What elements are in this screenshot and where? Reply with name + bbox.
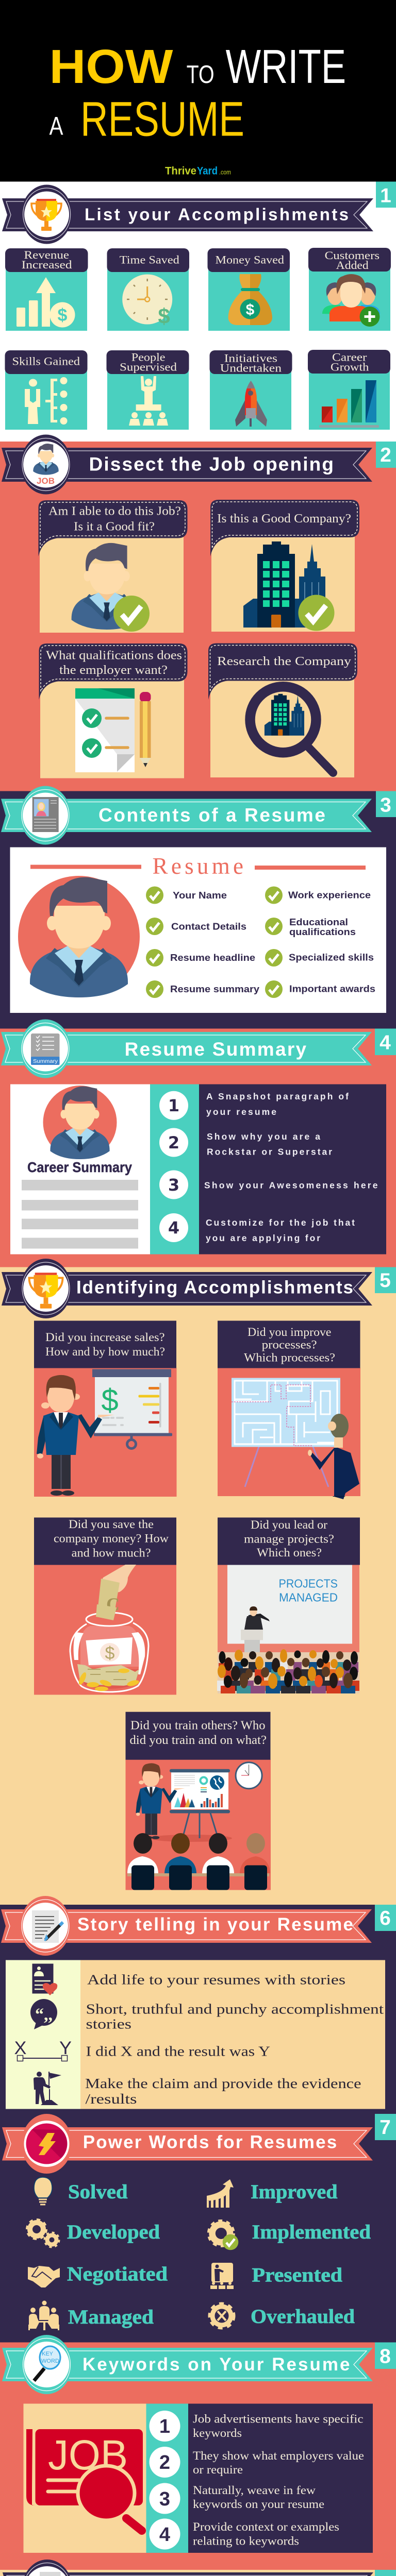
banner: Story telling: Story telling in your Resume	[77, 1914, 353, 1935]
heading: Resume: Resume	[153, 853, 243, 879]
card: saved money: company money? How	[54, 1532, 169, 1546]
icon: lightning	[26, 2124, 67, 2164]
panel: job keywords: Naturally, weave in few	[193, 2484, 316, 2497]
section 5: Identifying Accomplishments	[0, 1259, 396, 1905]
illustration: presenter and sales board: $	[101, 1383, 119, 1417]
illustration: speaker and audience: PROJECTS	[278, 1577, 338, 1590]
logo: ThriveYard.com	[165, 165, 231, 177]
icon: man with JOB label	[33, 444, 59, 486]
icon: revenue chart: $	[58, 306, 68, 325]
icon: X to Y: Y	[59, 2038, 72, 2058]
icon: trophy	[31, 199, 61, 231]
card: increase sales: Did you increase sales?	[45, 1331, 165, 1344]
panel: summary points	[150, 1084, 386, 1254]
panel: summary points: you are applying for	[206, 1233, 320, 1243]
panel: story telling tips: stories	[86, 2015, 131, 2032]
checklist of resume contents: Educational	[289, 917, 348, 927]
avatar in circle	[18, 876, 140, 997]
illustration: speaker and audience	[217, 1565, 359, 1693]
card: Is this a Good Company: Is this a Good Company?	[217, 512, 351, 526]
panel: job keywords: Provide context or examples	[193, 2520, 339, 2534]
card: improve processes: Did you improve	[248, 1326, 331, 1339]
panel: job keywords: 3	[159, 2488, 170, 2510]
icon: man with flag	[34, 2072, 61, 2105]
icon: resume document	[32, 797, 59, 832]
illustration: money jar: C	[106, 1594, 120, 1615]
checklist of resume contents: Resume headline	[170, 952, 255, 963]
illustration: money jar	[70, 1565, 148, 1692]
number tag 5: 5	[380, 1269, 391, 1292]
illustration: speaker and audience: MANAGED	[279, 1590, 338, 1604]
section 2: Dissect the Job opening	[0, 435, 396, 791]
banner: Resume Summary	[1, 1019, 372, 1078]
panel: summary points: Show why you are a	[207, 1131, 320, 1142]
number tag 6	[375, 1905, 396, 1931]
section 4: Resume Summary	[0, 1019, 396, 1267]
checklist of resume contents: Specialized skills	[289, 952, 374, 962]
title: A	[50, 111, 63, 140]
panel: job keywords	[24, 2404, 373, 2553]
icon: job search book	[26, 2429, 143, 2531]
checklist of resume contents: Work experience	[288, 889, 371, 901]
panel: story telling tips: Add life to your resumes with stories	[87, 1971, 345, 1988]
icon: trophy	[29, 1273, 62, 1309]
icon: customers	[322, 274, 380, 327]
card: improve processes: Which processes?	[244, 1351, 335, 1364]
icon: light bulb	[34, 2177, 52, 2205]
number tag 3	[376, 791, 396, 817]
icon: magnifier over company	[250, 687, 333, 773]
icon: wrench in gear	[209, 2303, 234, 2328]
panel: summary points: A Snapshot paragraph of	[206, 1091, 349, 1101]
logo: ThriveYard.com: Thrive	[165, 165, 196, 177]
banner: Dissect the Job opening: Dissect the Job opening	[89, 453, 334, 475]
section 7: Power Words for Resumes	[2, 2114, 396, 2330]
panel: job keywords: keywords	[193, 2427, 242, 2440]
number tag 7	[375, 2114, 396, 2140]
card: saved money	[34, 1518, 176, 1695]
banner: Contents of a Resume: Contents of a Resume	[98, 805, 325, 825]
card: increase sales: How and by how much?	[45, 1345, 165, 1359]
icon: rocket	[235, 381, 267, 427]
icon: keyword magnifier: KEY	[42, 2351, 54, 2357]
number tag 3: 3	[380, 794, 391, 816]
word: Solved: Solved	[68, 2181, 128, 2203]
number tag 5	[375, 1267, 396, 1293]
icon: growth arrow	[207, 2179, 234, 2208]
icon: keyword magnifier: WORD	[41, 2358, 59, 2364]
banner: Story telling	[1, 1896, 372, 1956]
icon: job search book: JOB	[48, 2432, 128, 2479]
icon: gear with tick	[208, 2221, 238, 2250]
panel: job keywords: 2	[159, 2452, 170, 2473]
icon: checklist and pencil	[75, 688, 151, 772]
number tag 9	[375, 2570, 396, 2576]
card: Am I able to do this Job	[38, 500, 188, 633]
card: Career Growth: Career	[332, 351, 367, 364]
panel: summary points: your resume	[206, 1107, 276, 1117]
card: Research the Company: Research the Company	[217, 655, 351, 668]
panel: career summary	[10, 1084, 150, 1254]
panel: story telling tips	[6, 1960, 385, 2109]
illustration: maze board	[232, 1378, 359, 1499]
panel: story telling tips: I did X and the result was Y	[86, 2043, 270, 2059]
panel: summary points: 4	[168, 1218, 179, 1238]
icon: people on platform	[129, 376, 168, 426]
card: Customers Added	[308, 248, 391, 331]
panel: career summary: Career Summary	[27, 1159, 132, 1175]
card: What qualifications: What qualifications does	[46, 649, 182, 663]
card: improve processes: processes?	[262, 1338, 317, 1351]
title: HOW	[50, 40, 173, 93]
banner: List your Accomplishments	[2, 184, 373, 244]
icon: man with JOB label: JOB	[37, 476, 55, 486]
icon: writing on paper	[32, 1910, 63, 1943]
card: Customers Added: Added	[336, 259, 369, 272]
card: People Supervised	[106, 350, 189, 430]
banner: Power Words	[2, 2114, 373, 2174]
number tag 2	[376, 442, 396, 468]
panel: job keywords: or require	[193, 2463, 243, 2477]
word: Managed: Managed	[68, 2306, 154, 2328]
icon: clock: $	[158, 304, 170, 328]
card: Am I able to do this Job: Am I able to do this Job?	[48, 504, 181, 518]
word: Negotiated: Negotiated	[67, 2263, 168, 2285]
checklist of resume contents	[146, 886, 375, 998]
panel: story telling tips: Make the claim and provide the evidence	[85, 2075, 361, 2091]
icon: team meeting	[28, 2301, 59, 2330]
card: train others: did you train and on what?	[129, 1733, 267, 1747]
word: Improved: Improved	[251, 2181, 338, 2203]
card: train others	[126, 1712, 271, 1890]
panel: job keywords: keywords on your resume	[193, 2498, 324, 2511]
number tag 8	[375, 2342, 396, 2369]
icon: revenue chart	[16, 277, 75, 328]
banner: Identifying Accomplishments: Identifying Accomplishments	[76, 1278, 353, 1297]
panel: job keywords: relating to keywords	[193, 2535, 299, 2548]
icon: job candidate with tick	[72, 543, 150, 632]
card: Research the Company	[208, 643, 357, 777]
banner: List your Accomplishments: List your Accomplishments	[85, 205, 349, 224]
card: Career Growth: Growth	[331, 361, 369, 373]
checklist of resume contents: Contact Details	[171, 921, 246, 931]
section 3: Contents of a Resume	[0, 786, 396, 1028]
section 6: Story telling in your Resume	[0, 1896, 396, 2343]
banner: Identifying Accomplishments	[2, 1259, 372, 1318]
card: Initiatives Undertaken	[209, 350, 292, 430]
card: Initiatives Undertaken: Undertaken	[220, 362, 282, 375]
banner: Types of Resumes	[3, 2560, 373, 2576]
icon: money bag: $	[246, 301, 255, 318]
icon: growth bars	[319, 380, 379, 428]
panel: resume contents	[10, 847, 386, 1013]
word: Overhauled: Overhauled	[251, 2306, 355, 2328]
section 8: Keywords on Your Resume	[0, 2335, 396, 2570]
section 1: List your Accomplishments	[0, 181, 396, 442]
title	[50, 40, 346, 146]
card: saved money: Did you save the	[69, 1518, 154, 1531]
card: Time Saved	[107, 248, 189, 331]
icon: summary document	[31, 1033, 60, 1065]
panel: summary points: 2	[168, 1133, 179, 1153]
card: Time Saved: Time Saved	[120, 253, 179, 266]
icon: speech bubble: “,,	[35, 2005, 53, 2024]
card: train others: Did you train others? Who	[130, 1718, 265, 1732]
card: Initiatives Undertaken: Initiatives	[224, 351, 277, 364]
number tag 6: 6	[380, 1907, 391, 1929]
card: improve processes	[218, 1321, 360, 1499]
title: RESUME	[80, 92, 244, 146]
icon: handshake	[28, 2266, 60, 2287]
banner: Resume Summary: Resume Summary	[125, 1039, 307, 1060]
icon: skills tree	[25, 377, 67, 425]
number tag 2: 2	[380, 444, 391, 466]
panel: job keywords: They show what employers value	[193, 2449, 364, 2463]
card: lead projects: Which ones?	[257, 1546, 322, 1560]
icon: speech bubble	[30, 1999, 57, 2029]
logo: ThriveYard.com: .com	[219, 168, 231, 176]
checklist of resume contents: Your Name	[173, 890, 227, 901]
banner: Dissect the Job opening	[2, 435, 372, 495]
checklist of resume contents: Resume summary	[170, 984, 260, 994]
panel: summary points: Rockstar or Superstar	[207, 1147, 332, 1157]
icon: presenter	[210, 2263, 234, 2289]
panel: job keywords: 1	[159, 2416, 170, 2437]
number tag 4	[375, 1028, 396, 1055]
panel: job keywords: Job advertisements have specific	[193, 2412, 363, 2426]
card: Skills Gained	[5, 350, 88, 430]
card: Career Growth	[308, 350, 390, 430]
number tag 8: 8	[380, 2345, 391, 2368]
panel: summary points: 1	[168, 1096, 179, 1115]
icon: resume pages	[31, 2572, 61, 2576]
banner: Power Words: Power Words for Resumes	[83, 2132, 337, 2153]
icon: X to Y: X	[14, 2038, 27, 2058]
icon: summary document: Summary	[33, 1059, 58, 1064]
icon: clock	[122, 274, 172, 328]
illustration: trainer, chart board and audience	[127, 1762, 270, 1890]
card: What qualifications	[39, 643, 188, 778]
checklist of resume contents: qualifications	[289, 926, 356, 937]
panel: summary points: Show your Awesomeness here	[204, 1180, 378, 1190]
card: Skills Gained: Skills Gained	[12, 355, 80, 368]
card: lead projects: manage projects?	[244, 1533, 334, 1546]
title: TO	[187, 61, 214, 89]
section 9: Types of Resumes	[0, 2560, 396, 2576]
logo: ThriveYard.com: Yard	[197, 165, 218, 177]
panel: story telling tips: /results	[86, 2091, 137, 2107]
card: Revenue Increased	[5, 248, 88, 331]
card: saved money: and how much?	[72, 1546, 151, 1560]
panel: story telling tips: Short, truthful and punchy accomplishment	[86, 2001, 384, 2016]
card: Revenue Increased: Revenue	[24, 248, 69, 261]
icon: money bag	[228, 274, 272, 325]
card: lead projects	[217, 1518, 360, 1693]
icon: gears	[27, 2219, 59, 2247]
word: Implemented: Implemented	[252, 2221, 371, 2243]
word: Developed: Developed	[67, 2221, 160, 2243]
word: Presented: Presented	[252, 2264, 342, 2286]
checklist of resume contents: Important awards	[289, 983, 375, 994]
number tag 1: 1	[380, 184, 391, 207]
number tag 1	[376, 181, 396, 208]
icon: office buildings with tick	[243, 541, 335, 631]
panel: summary points: 3	[168, 1175, 179, 1195]
icon: resume with heart	[32, 1964, 57, 1995]
header: title block	[0, 0, 396, 181]
card: Revenue Increased: Increased	[22, 258, 72, 271]
card: Money Saved: Money Saved	[216, 253, 284, 266]
card: Am I able to do this Job: Is it a Good fit?	[74, 520, 155, 533]
icon: X to Y	[14, 2038, 72, 2061]
illustration: money jar: $	[105, 1643, 115, 1663]
card: People Supervised: Supervised	[120, 361, 177, 373]
number tag 4: 4	[380, 1031, 391, 1054]
card: Customers Added: Customers	[325, 249, 380, 262]
panel: job keywords: 4	[159, 2524, 170, 2546]
card: What qualifications: the employer want?	[59, 664, 168, 677]
panel: summary points: Customize for the job that	[206, 1217, 355, 1228]
card: lead projects: Did you lead or	[251, 1518, 327, 1532]
card: Money Saved	[207, 248, 290, 331]
card: People Supervised: People	[131, 351, 165, 364]
number tag 7: 7	[380, 2116, 391, 2139]
banner: Contents of a Resume	[1, 786, 372, 845]
banner: Keywords	[2, 2335, 373, 2394]
card: increase sales	[34, 1321, 176, 1497]
illustration: presenter and sales board	[37, 1369, 172, 1496]
icon: keyword magnifier	[34, 2346, 60, 2381]
banner: Keywords: Keywords on Your Resume	[82, 2354, 350, 2375]
title: WRITE	[226, 40, 346, 93]
card: Is this a Good Company	[210, 500, 359, 632]
